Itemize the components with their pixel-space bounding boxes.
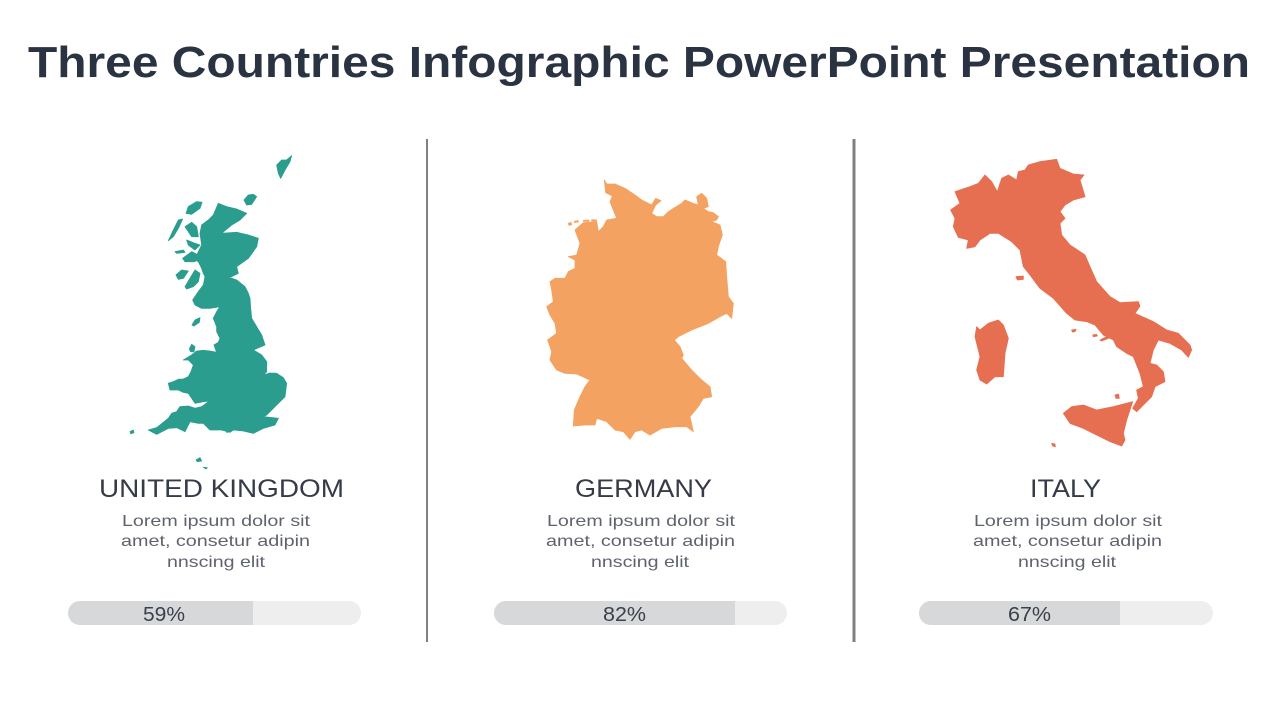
- country name: GERMANY: [575, 475, 712, 503]
- description: [546, 513, 736, 571]
- map: Italy: [951, 159, 1192, 447]
- progress bar: 67%: 67%: [1008, 604, 1051, 626]
- description: Lorem ipsum dolor sit: [122, 513, 311, 530]
- map: Germany: [547, 180, 733, 439]
- description: nnscing elit: [167, 554, 266, 571]
- description: amet, consetur adipin: [546, 533, 735, 550]
- progress bar: 82%: 82%: [603, 604, 646, 626]
- progress bar: 59%: 59%: [143, 604, 185, 626]
- country name: ITALY: [1030, 475, 1101, 503]
- panel: Germany: [494, 180, 787, 626]
- description: amet, consetur adipin: [121, 533, 310, 550]
- panel: Italy: [919, 159, 1213, 626]
- description: nnscing elit: [1018, 554, 1117, 571]
- description: amet, consetur adipin: [973, 533, 1162, 550]
- description: Lorem ipsum dolor sit: [974, 513, 1163, 530]
- map: United Kingdom: [130, 156, 292, 469]
- description: Lorem ipsum dolor sit: [547, 513, 736, 530]
- progress bar: 67%: [919, 601, 1213, 626]
- country name: UNITED KINGDOM: [99, 475, 344, 503]
- description: [973, 513, 1163, 571]
- panel: United Kingdom: [68, 156, 361, 626]
- description: nnscing elit: [591, 554, 690, 571]
- progress bar: 59%: [68, 601, 361, 626]
- title: Three Countries Infographic PowerPoint Presentation: [28, 38, 1250, 87]
- description: [121, 513, 311, 571]
- progress bar: 82%: [494, 601, 787, 626]
